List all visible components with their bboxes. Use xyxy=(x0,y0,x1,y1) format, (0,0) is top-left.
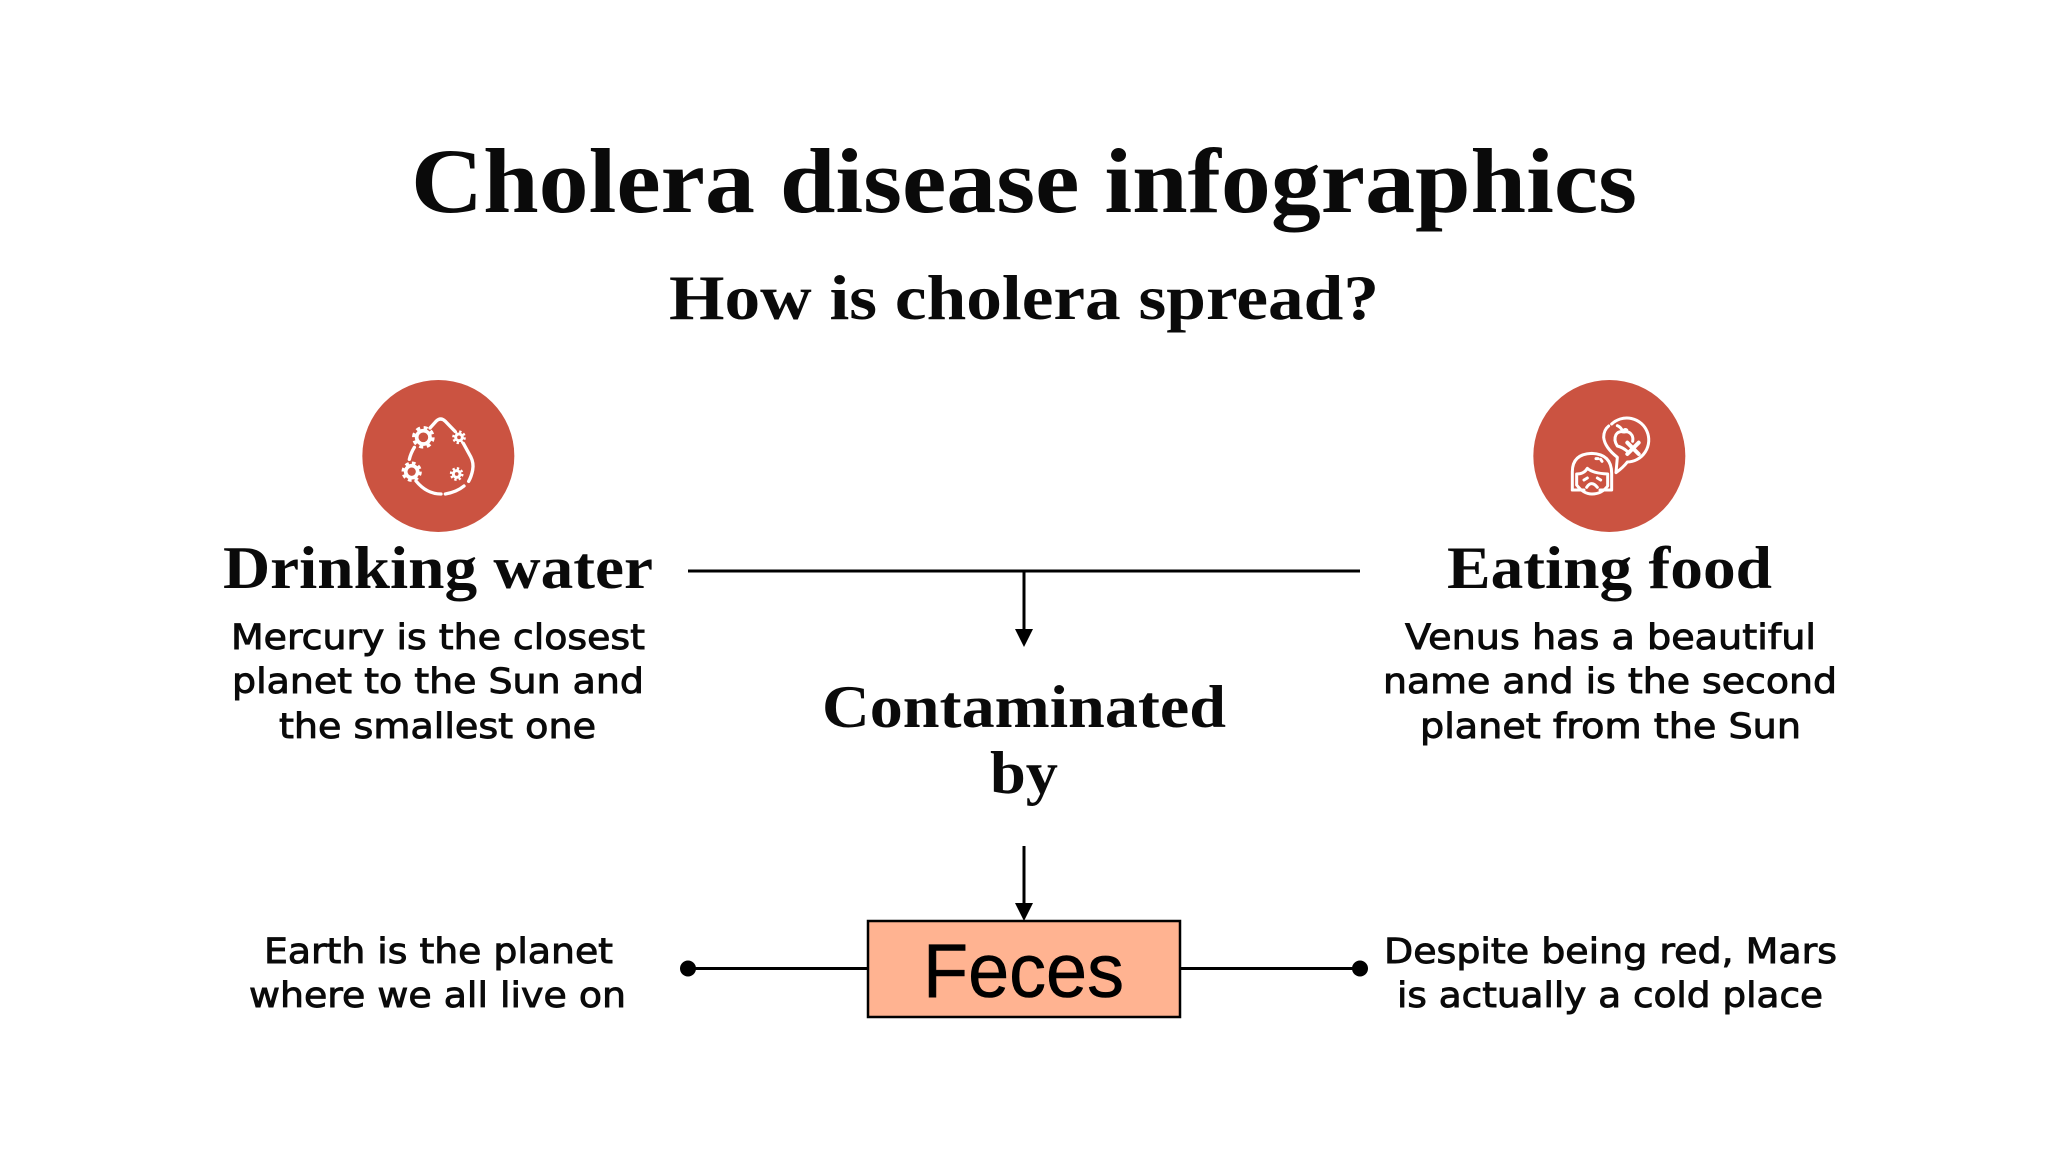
box: feces xyxy=(868,921,1180,1017)
text block: mars: Despite being red, Mars xyxy=(1384,932,1837,972)
text block: drinking water description: planet to the Sun and xyxy=(232,662,644,702)
text block: eating food description: planet from the Sun xyxy=(1420,707,1801,747)
text block: eating food description xyxy=(1383,618,1837,747)
icon: contaminated water drop xyxy=(362,380,514,532)
text block: drinking water description xyxy=(231,618,645,747)
heading: eating food: Eating food xyxy=(1447,535,1772,601)
text block: mars: is actually a cold place xyxy=(1397,976,1823,1016)
text block: mars xyxy=(1384,932,1837,1016)
text block: earth xyxy=(249,932,626,1016)
text block: eating food description: Venus has a beautiful xyxy=(1405,618,1816,658)
box: feces: Feces xyxy=(923,929,1124,1014)
connector: right line with dot xyxy=(1180,960,1368,976)
heading: drinking water: Drinking water xyxy=(223,535,653,601)
text block: drinking water description: Mercury is the closest xyxy=(231,618,645,658)
text block: eating food description: name and is the second xyxy=(1383,662,1837,702)
heading: contaminated by xyxy=(822,674,1226,806)
heading: contaminated by: by xyxy=(990,740,1058,806)
title: Cholera disease infographics xyxy=(411,130,1637,232)
text block: earth: where we all live on xyxy=(249,976,626,1016)
connector: left line with dot xyxy=(680,960,867,976)
icon: sick face with crossed-out apple xyxy=(1533,380,1685,532)
text block: drinking water description: the smallest one xyxy=(279,707,596,747)
arrow: contaminated by to feces xyxy=(1015,846,1033,921)
subtitle: How is cholera spread? xyxy=(669,262,1379,333)
heading: contaminated by: Contaminated xyxy=(822,674,1226,740)
connector: top horizontal line with down arrow xyxy=(688,571,1360,647)
text block: earth: Earth is the planet xyxy=(264,932,613,972)
